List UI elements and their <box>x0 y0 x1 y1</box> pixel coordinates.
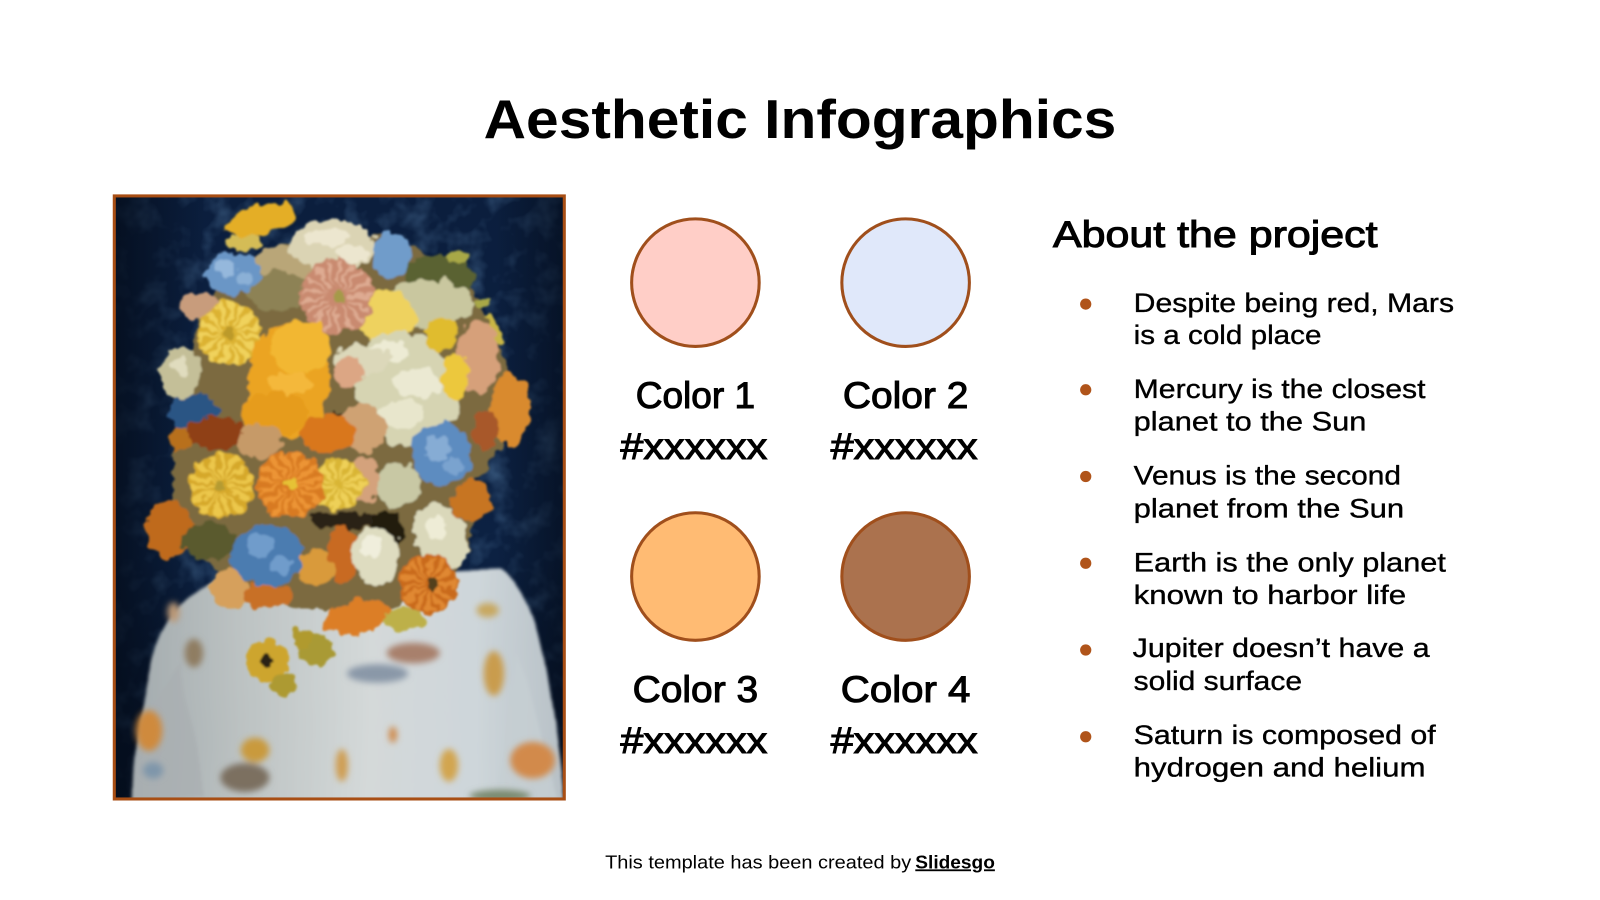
item: Mercury: planet to the Sun <box>1134 407 1366 437</box>
swatch: color 1 <box>620 219 767 467</box>
item: Mars: is a cold place <box>1134 320 1321 350</box>
white hydrangea top <box>290 220 376 269</box>
item: Mars: Despite being red, Mars <box>1134 288 1454 318</box>
item: Mars <box>1080 288 1454 350</box>
pink dahlia <box>300 259 373 333</box>
orange dahlia left <box>146 500 193 557</box>
swatch: color 4: Color 4 <box>841 669 970 710</box>
yellow ball <box>424 318 457 351</box>
swatch: color 3: Color 3 <box>633 669 758 710</box>
item: Venus: Venus is the second <box>1134 461 1401 491</box>
item: Mercury <box>1080 374 1426 437</box>
cream clusters <box>160 346 201 399</box>
swatch: color 2: Color 2 <box>843 375 968 416</box>
footer credit: This template has been created by <box>605 851 912 872</box>
dark orange left <box>182 417 251 450</box>
item: Saturn: hydrogen and helium <box>1134 753 1426 783</box>
foliage <box>405 252 478 290</box>
item: Jupiter: solid surface <box>1134 666 1302 696</box>
dark blue cluster <box>169 393 218 434</box>
peach right of yellow <box>351 457 380 502</box>
swatch: color 3: #xxxxxx <box>620 720 767 761</box>
item: Jupiter <box>1080 633 1430 696</box>
item: Jupiter: Jupiter doesn’t have a <box>1133 633 1430 663</box>
swatch: color 4: #xxxxxx <box>831 720 978 761</box>
flowers <box>146 197 531 698</box>
orange flower lower <box>399 554 458 613</box>
title: Aesthetic Infographics <box>484 88 1116 150</box>
shirt floral print <box>136 602 555 802</box>
photo frame <box>114 196 564 799</box>
swatch: color 4 <box>831 513 978 761</box>
orange <box>327 528 357 585</box>
cream cluster center <box>352 328 462 449</box>
orange flower <box>257 451 324 518</box>
yellow flower low <box>189 453 254 518</box>
orange flower right <box>451 481 492 521</box>
dark leaves <box>181 522 238 559</box>
item: Saturn <box>1080 720 1436 783</box>
blue hydrangea <box>411 422 472 486</box>
heading: about the project: About the project <box>1053 214 1378 255</box>
item: Mercury: Mercury is the closest <box>1134 374 1426 404</box>
peach <box>334 357 364 388</box>
swatch: color 3 <box>620 513 767 761</box>
item: Earth <box>1080 547 1447 610</box>
cream low <box>352 527 399 584</box>
tan foliage top <box>254 243 314 280</box>
peach ball <box>211 570 250 609</box>
yellow top flower <box>222 198 298 240</box>
swatch: color 1: #xxxxxx <box>620 426 767 467</box>
photo: person with flower bouquet head <box>114 196 564 806</box>
dark gaps <box>307 511 377 530</box>
pale yellow flower <box>355 290 416 343</box>
peach dahlia right <box>456 320 499 394</box>
blue hydrangea right <box>372 232 411 279</box>
footer credit: Slidesgo <box>915 851 995 872</box>
orange dahlia lower <box>320 594 394 641</box>
orange dahlia right <box>490 371 531 445</box>
item: Earth: known to harbor life <box>1134 580 1406 610</box>
yellow flower right <box>313 458 364 509</box>
item: Venus: planet from the Sun <box>1134 493 1404 523</box>
item: Venus <box>1080 461 1404 523</box>
blue hydrangea left <box>205 252 260 295</box>
yellow flower <box>198 302 261 365</box>
swatch: color 2 <box>831 219 978 467</box>
big orange-yellow flower <box>248 322 330 437</box>
item: Saturn: Saturn is composed of <box>1134 720 1436 750</box>
bouquet base <box>171 233 511 610</box>
blue hydrangea low <box>232 526 303 587</box>
swatch: color 2: #xxxxxx <box>831 426 978 467</box>
orange dahlia center <box>300 414 357 453</box>
shirt <box>132 569 563 806</box>
sunflowers <box>246 640 289 683</box>
swatch: color 1: Color 1 <box>636 375 755 416</box>
bullet list <box>1080 288 1454 783</box>
cream small <box>376 462 420 507</box>
item: Earth: Earth is the only planet <box>1134 547 1447 577</box>
